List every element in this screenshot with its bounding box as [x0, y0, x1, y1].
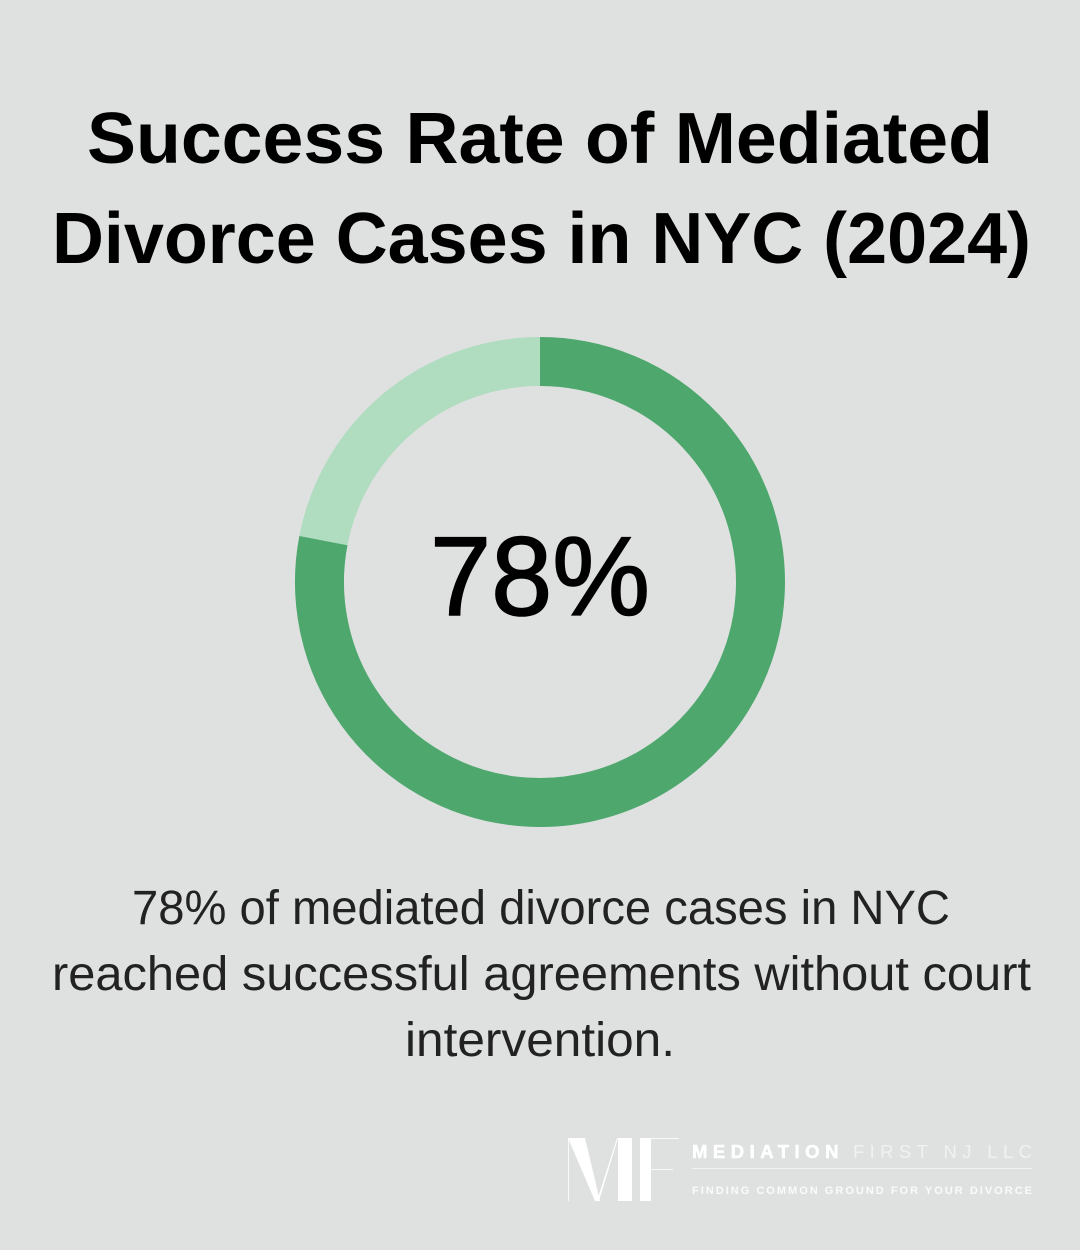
logo name: MEDIATION — [692, 1141, 844, 1162]
center percentage: 78% — [430, 514, 650, 639]
logo: Mediation First NJ LLC — [568, 1138, 1032, 1201]
logo tagline: FINDING COMMON GROUND FOR YOUR DIVORCE — [692, 1185, 1032, 1197]
description text — [52, 882, 1031, 1067]
title: Success Rate of Mediated — [87, 99, 993, 179]
donut success segment — [319, 362, 760, 803]
title — [52, 99, 1031, 279]
logo mark MF — [568, 1138, 679, 1201]
description text: intervention. — [405, 1014, 675, 1067]
logo divider — [692, 1168, 1032, 1169]
title: Divorce Cases in NYC (2024) — [52, 199, 1031, 279]
logo: Mediation First NJ LLC: FIRST NJ LLC — [853, 1141, 1032, 1162]
donut chart: 78% — [319, 362, 760, 803]
description text: reached successful agreements without court — [52, 948, 1031, 1001]
description text: 78% of mediated divorce cases in NYC — [132, 882, 950, 935]
donut remainder segment — [323, 362, 540, 541]
